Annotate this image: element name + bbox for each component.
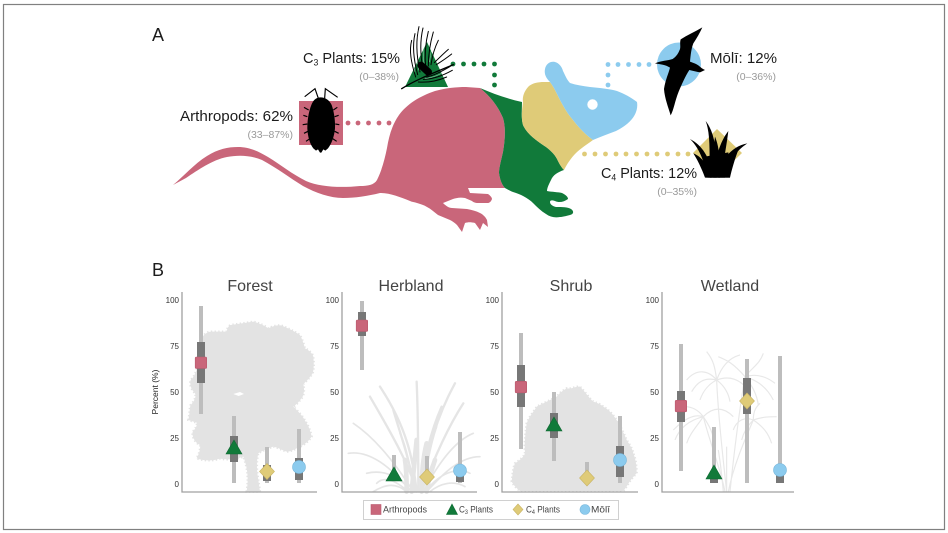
label: Mōlī share: Mōlī: 12% bbox=[710, 50, 777, 67]
series: C3 plants bbox=[386, 455, 402, 481]
y ticks: 0 bbox=[335, 480, 340, 489]
y ticks bbox=[646, 296, 660, 489]
y ticks: 0 bbox=[655, 480, 660, 489]
y ticks: 50 bbox=[330, 388, 340, 397]
y ticks: 75 bbox=[170, 342, 180, 351]
chart: Herbland bbox=[326, 278, 480, 492]
chart: Wetland bbox=[646, 278, 794, 492]
y ticks: 25 bbox=[650, 434, 660, 443]
silhouette: tree bbox=[188, 322, 314, 492]
icon: C4 plant (grass tuft) bbox=[690, 121, 747, 178]
mouse: eye bbox=[587, 99, 598, 110]
y ticks: 50 bbox=[490, 388, 500, 397]
icon: arthropod bbox=[299, 89, 343, 153]
legend: C3 plants: C bbox=[459, 504, 466, 514]
y axis title: Percent (%) bbox=[150, 369, 160, 414]
axes bbox=[662, 292, 794, 492]
y ticks: 50 bbox=[650, 388, 660, 397]
y ticks: 100 bbox=[646, 296, 660, 305]
y ticks: 25 bbox=[490, 434, 500, 443]
heading: Herbland: Herbland bbox=[379, 278, 443, 295]
label: C4 plants range: (0–35%) bbox=[657, 186, 697, 198]
legend bbox=[364, 500, 618, 520]
y ticks: 0 bbox=[175, 480, 180, 489]
series: C4 plants bbox=[260, 447, 274, 483]
series: Mōlī bbox=[454, 432, 466, 483]
panel A: mouse diet diagram bbox=[173, 27, 777, 232]
series: C3 plants bbox=[546, 392, 562, 461]
mouse: Mōlī section (head) bbox=[545, 62, 637, 140]
series: C3 plants bbox=[706, 427, 722, 483]
heading: Shrub: Shrub bbox=[550, 278, 592, 295]
y ticks: 100 bbox=[326, 296, 340, 305]
icon: C3 plant (pine branch) bbox=[402, 27, 453, 89]
series: Mōlī bbox=[774, 356, 786, 483]
legend: arthropods: Arthropods bbox=[383, 504, 427, 514]
legend: C3 plants bbox=[446, 504, 493, 516]
y ticks bbox=[326, 296, 340, 489]
series: arthropods bbox=[515, 333, 527, 449]
series: arthropods bbox=[195, 306, 207, 414]
legend: C4 plants: Plants bbox=[535, 504, 560, 514]
series: C4 plants bbox=[580, 462, 594, 486]
silhouette: grass bbox=[348, 382, 480, 492]
panel label: A: A bbox=[152, 25, 164, 45]
legend: C3 plants: 3 bbox=[465, 510, 469, 516]
label: Mōlī range: (0–36%) bbox=[736, 71, 776, 83]
label: arthropods range: (33–87%) bbox=[247, 129, 293, 141]
legend: C4 plants: 4 bbox=[532, 510, 536, 516]
label: C3 plants share: 3 bbox=[314, 58, 318, 68]
y ticks bbox=[486, 296, 500, 489]
series: Mōlī bbox=[614, 416, 626, 483]
icon: Mōlī (albatross) bbox=[655, 27, 705, 115]
series: C4 plants bbox=[740, 359, 754, 483]
dotted connector: C3 plants bbox=[451, 62, 497, 87]
mouse: C4 plant section bbox=[522, 82, 593, 170]
y ticks: 75 bbox=[650, 342, 660, 351]
series: C4 plants bbox=[420, 456, 434, 485]
legend: C3 plants: Plants bbox=[468, 504, 493, 514]
mouse: arthropod section with tail bbox=[173, 87, 505, 232]
legend: C4 plants: C bbox=[526, 504, 532, 514]
label: C4 plants share: C bbox=[601, 165, 612, 182]
axes bbox=[342, 292, 477, 492]
heading: Forest: Forest bbox=[227, 278, 273, 295]
label: C3 plants share: Plants: 15% bbox=[318, 50, 400, 67]
series: arthropods bbox=[356, 301, 368, 370]
axes bbox=[182, 292, 317, 492]
y ticks: 100 bbox=[486, 296, 500, 305]
legend: Mōlī bbox=[580, 504, 611, 514]
chart: Forest bbox=[166, 278, 317, 492]
dotted connector: Mōlī bbox=[606, 62, 651, 87]
panel label: B: B bbox=[152, 260, 164, 280]
y ticks: 100 bbox=[166, 296, 180, 305]
series: Mōlī bbox=[292, 429, 306, 483]
y ticks: 75 bbox=[330, 342, 340, 351]
heading: Wetland: Wetland bbox=[701, 278, 759, 295]
chart: Shrub bbox=[486, 278, 638, 492]
legend: Mōlī: Mōlī bbox=[591, 504, 611, 514]
y ticks: 25 bbox=[170, 434, 180, 443]
dotted connector: arthropods bbox=[346, 121, 391, 125]
silhouette: shrub bbox=[512, 387, 637, 491]
y ticks: 25 bbox=[330, 434, 340, 443]
mouse: C3 plant section bbox=[480, 88, 573, 217]
y ticks: 75 bbox=[490, 342, 500, 351]
y ticks bbox=[166, 296, 180, 489]
series: arthropods bbox=[675, 344, 687, 471]
label: C3 plants range: (0–38%) bbox=[359, 71, 399, 83]
label: C3 plants share: C bbox=[303, 50, 314, 67]
label: C4 plants share: Plants: 12% bbox=[616, 165, 697, 182]
label: arthropods share: Arthropods: 62% bbox=[180, 108, 293, 125]
silhouette: papyrus bbox=[673, 352, 777, 492]
axes bbox=[502, 292, 638, 492]
y ticks: 0 bbox=[495, 480, 500, 489]
label: C4 plants share: 4 bbox=[611, 172, 616, 182]
legend: C4 plants bbox=[513, 504, 560, 516]
dotted connector: C4 plants bbox=[582, 152, 690, 156]
series: C3 plants bbox=[226, 416, 242, 483]
y ticks: 50 bbox=[170, 388, 180, 397]
